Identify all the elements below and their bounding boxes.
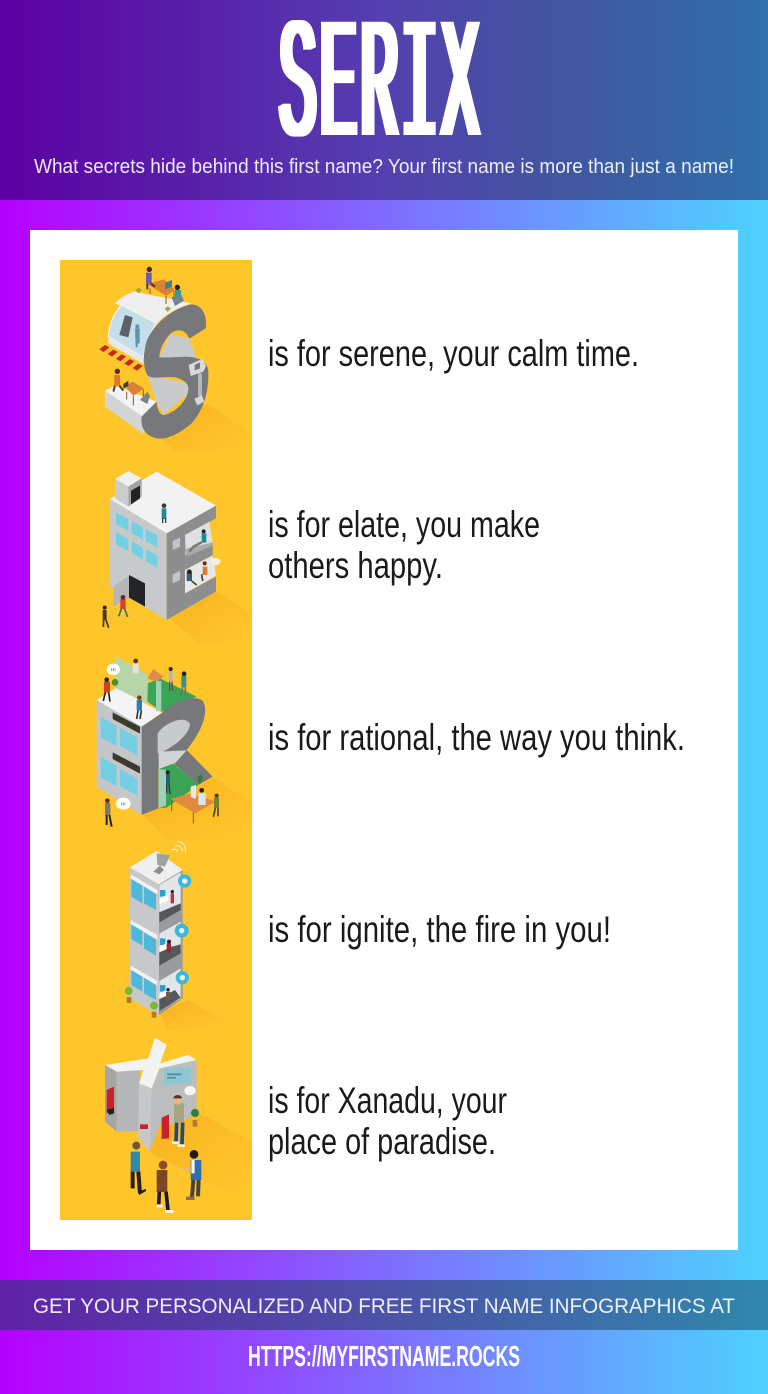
footer website link: HTTPS://MYFIRSTNAME.ROCKS	[248, 1341, 520, 1373]
footer call-to-action band: GET YOUR PERSONALIZED AND FREE FIRST NAME INFOGRAPHICS AT	[33, 1295, 735, 1318]
text: letter I: is for ignite, the fire in you!	[268, 909, 611, 950]
icon: isometric letter S building	[99, 267, 252, 452]
speech bubble greetings: HI	[111, 667, 116, 672]
subtitle: What secrets hide behind this first name? Your first name is more than just a name!	[34, 156, 734, 178]
text: letter E: is for elate, you make	[268, 504, 540, 545]
text: letter E	[268, 504, 540, 586]
footer call-to-action band	[0, 1280, 768, 1330]
white content panel	[30, 230, 738, 1250]
speech bubble greetings	[111, 667, 126, 806]
icon: isometric letter E building	[103, 471, 252, 645]
icon: isometric letter R building	[97, 657, 252, 840]
icon: isometric letter I tower	[125, 842, 225, 1030]
yellow illustration column	[60, 260, 252, 1220]
text: letter E: others happy.	[268, 545, 443, 586]
header band	[0, 0, 768, 200]
text: letter X: place of paradise.	[268, 1121, 496, 1162]
speech bubble greetings: HI	[121, 801, 126, 806]
icon: isometric letter X wall with people	[105, 1038, 252, 1213]
text: letter S: is for serene, your calm time.	[268, 333, 639, 374]
text: letter X	[268, 1080, 507, 1162]
text: letter X: is for Xanadu, your	[268, 1080, 507, 1121]
